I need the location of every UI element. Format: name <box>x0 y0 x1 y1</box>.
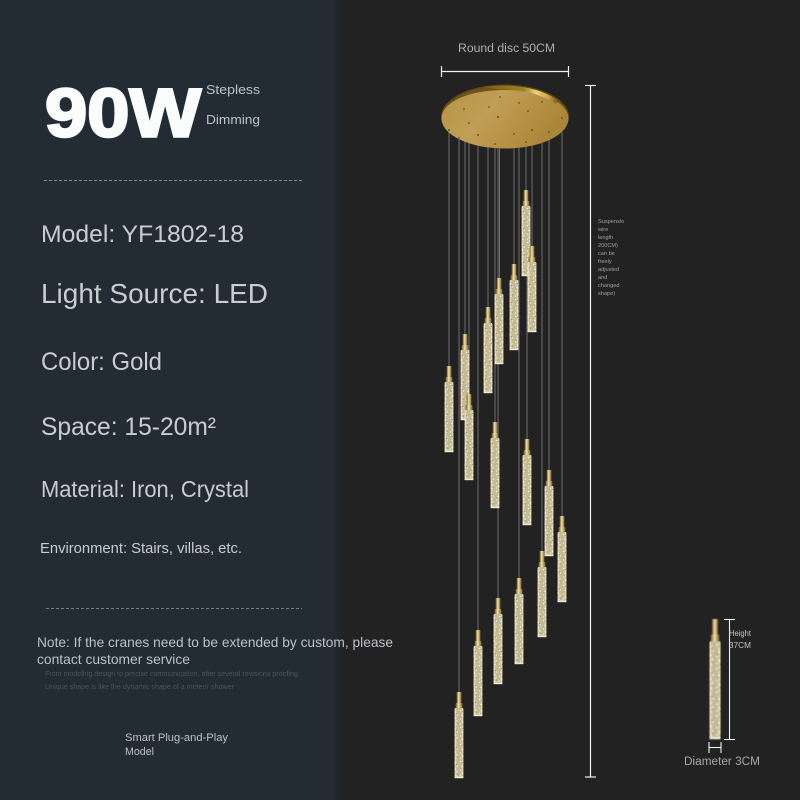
text: smart plug-and-play model <box>125 732 228 758</box>
note: custom extension <box>37 634 393 667</box>
label: suspension wire length: shape) <box>598 291 615 297</box>
heading: 90W power: 90W <box>45 74 202 152</box>
canopy: round gold disc <box>441 84 569 148</box>
dimension: pendant diameter <box>709 742 721 753</box>
label: suspension wire length: length <box>598 235 613 241</box>
dimension: suspension length <box>585 86 596 777</box>
spec: space: Space: 15-20m² <box>41 413 216 441</box>
label: suspension wire length: 200CM) <box>598 243 618 249</box>
label: suspension wire length: freely <box>598 259 612 265</box>
label: suspension wire length: adjusted <box>598 267 619 273</box>
spec: color: Color: Gold <box>41 348 162 376</box>
wires: suspension wires <box>449 130 562 694</box>
divider: bottom dashed line <box>46 608 302 610</box>
dimension: pendant height <box>724 620 735 740</box>
label: suspension wire length: Suspensio <box>598 219 624 225</box>
spec: model: Model: YF1802-18 <box>41 221 244 248</box>
label: diameter 3CM: Diameter 3CM <box>684 756 760 768</box>
faint background text: Unique shape is like the dynamic shape of a meteor shower <box>45 682 235 691</box>
detail: single crystal pendant <box>710 619 720 739</box>
label: round disc size: Round disc 50CM <box>458 43 555 55</box>
divider: top dashed line <box>44 180 302 182</box>
spec: light source: Light Source: LED <box>41 278 268 309</box>
pendants: crystal tube lights <box>445 190 566 778</box>
label: suspension wire length: wire <box>597 227 608 233</box>
label: height 37CM: Height <box>729 628 752 638</box>
label: height 37CM <box>729 628 752 650</box>
panel: left specification panel <box>0 0 342 800</box>
note: custom extension: contact customer service <box>37 651 190 667</box>
label: suspension wire length <box>597 219 624 297</box>
text: smart plug-and-play model: Smart Plug-and-Play <box>125 732 228 744</box>
text: stepless dimming: Stepless <box>206 82 261 97</box>
dimension: disc width <box>442 66 568 77</box>
text: stepless dimming: Dimming <box>206 112 260 127</box>
spec: material: Material: Iron, Crystal <box>41 476 249 502</box>
text: specification list <box>40 221 268 557</box>
label: suspension wire length: changed <box>598 283 619 289</box>
label: suspension wire length: can be <box>598 251 615 257</box>
spec: environment: Environment: Stairs, villas, etc. <box>40 540 242 557</box>
label: suspension wire length: and <box>598 275 607 281</box>
text: stepless dimming <box>206 82 261 127</box>
faint background text <box>45 669 298 691</box>
text: smart plug-and-play model: Model <box>125 746 154 758</box>
label: height 37CM: 37CM <box>729 640 751 650</box>
note: custom extension: Note: If the cranes need to be extended by custom, please <box>37 634 393 650</box>
faint background text: From modeling design to precise communication, after several revisions proofing <box>45 669 298 678</box>
